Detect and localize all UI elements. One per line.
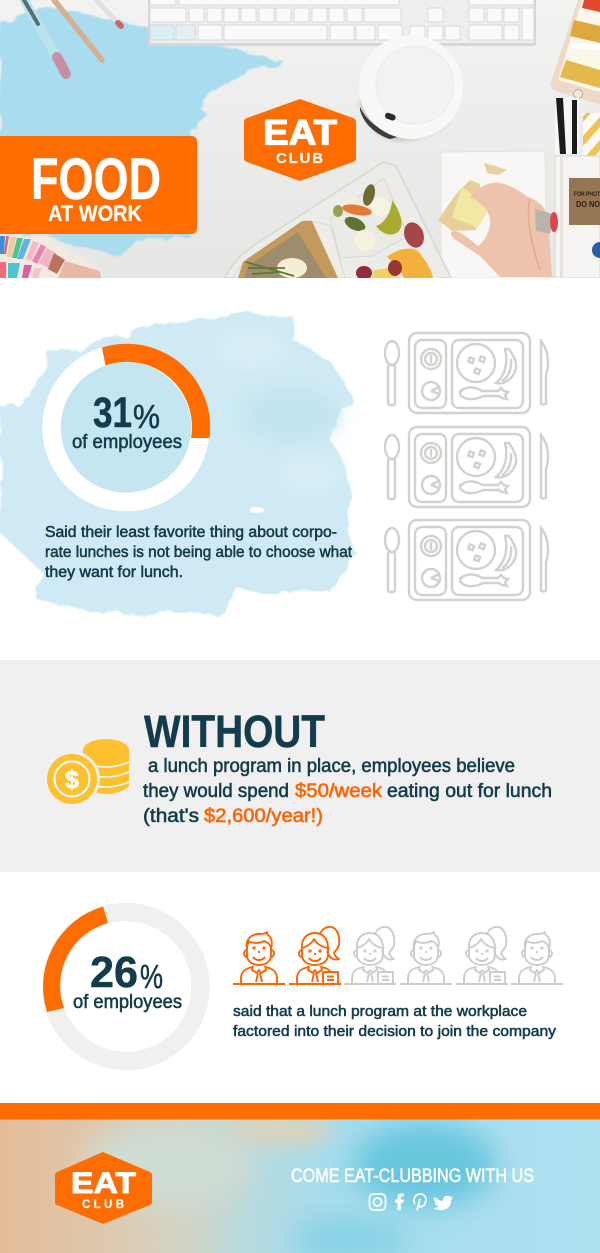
- body text with highlighted amounts: $2,600/year!): [204, 806, 323, 827]
- icon: coins: [44, 739, 129, 807]
- watercolor blotches: [85, 1114, 497, 1253]
- icon row: employees: [233, 927, 563, 984]
- body text with highlighted amounts: eating out for lunch: [387, 781, 552, 802]
- title: food: FOOD: [31, 147, 161, 212]
- donut chart: 26 percent: [43, 906, 200, 1061]
- panel: without lunch program: [0, 660, 600, 872]
- icon: pinterest: [414, 1194, 426, 1210]
- logo: eat club: CLUB: [82, 1199, 124, 1211]
- icon: twitter: [434, 1194, 453, 1210]
- logo: eat club: CLUB: [276, 150, 323, 167]
- panel: header photo: [0, 0, 600, 280]
- body text with highlighted amounts: a lunch program in place, employees believe: [148, 756, 515, 777]
- icon: lunch tray 2: [385, 427, 548, 507]
- description text: they want for lunch.: [45, 564, 183, 581]
- orange divider bar: [0, 1103, 600, 1120]
- call to action: COME EAT-CLUBBING WITH US: [291, 1166, 534, 1187]
- stat value: 26%: %: [140, 958, 163, 995]
- title panel: food at work: [0, 136, 197, 234]
- description text: Said their least favorite thing about corpo-: [45, 524, 337, 541]
- heading: without: WITHOUT: [144, 706, 325, 757]
- panel: 31 percent statistic: [0, 313, 358, 615]
- description text: [233, 1003, 557, 1040]
- panel: footer: [0, 1114, 600, 1253]
- description text: rate lunches is not being able to choose what: [45, 544, 353, 561]
- icon: lunch tray 1: [385, 333, 548, 413]
- lunch box: [225, 162, 451, 280]
- stat label: of employees: [72, 432, 182, 453]
- coloured pens: [24, 0, 121, 74]
- stat label: of employees: [73, 992, 182, 1013]
- body text with highlighted amounts: (that's: [143, 806, 199, 827]
- icon: coins: $: [65, 766, 79, 794]
- icon: lunch tray 3: [385, 520, 548, 600]
- keyboard: [148, 0, 536, 46]
- logo: eat club: [244, 99, 356, 181]
- donut chart: 31 percent: [52, 344, 210, 502]
- subtitle: at work: AT WORK: [48, 201, 142, 226]
- phone: [551, 0, 600, 105]
- icon: facebook: [395, 1194, 404, 1210]
- description text: factored into their decision to join the company: [233, 1023, 557, 1040]
- logo: eat club: EAT: [71, 1167, 136, 1200]
- coffee cup: [359, 35, 463, 141]
- stat value: 26%: 26: [90, 948, 138, 997]
- logo: eat club: EAT: [263, 114, 337, 152]
- watercolor wash in header: [0, 8, 283, 256]
- watercolor wash: [0, 313, 358, 615]
- stat value: 31%: %: [133, 398, 160, 435]
- body text with highlighted amounts: [143, 756, 552, 827]
- icon: instagram: [370, 1194, 386, 1210]
- body text with highlighted amounts: they would spend: [143, 781, 289, 802]
- napkin: [441, 151, 547, 278]
- social icons: [370, 1194, 453, 1210]
- panel: 26 percent statistic: [43, 906, 563, 1061]
- stat value: 31%: 31: [93, 389, 132, 437]
- logo: eat club: [55, 1152, 152, 1224]
- stat value: 26%: [90, 948, 163, 997]
- desk items on right: [555, 98, 600, 278]
- description text: [45, 524, 353, 581]
- hand holding sandwich: [438, 163, 558, 277]
- colour swatches: [0, 236, 103, 278]
- body text with highlighted amounts: $50/week: [295, 781, 383, 802]
- description text: said that a lunch program at the workplace: [233, 1003, 527, 1020]
